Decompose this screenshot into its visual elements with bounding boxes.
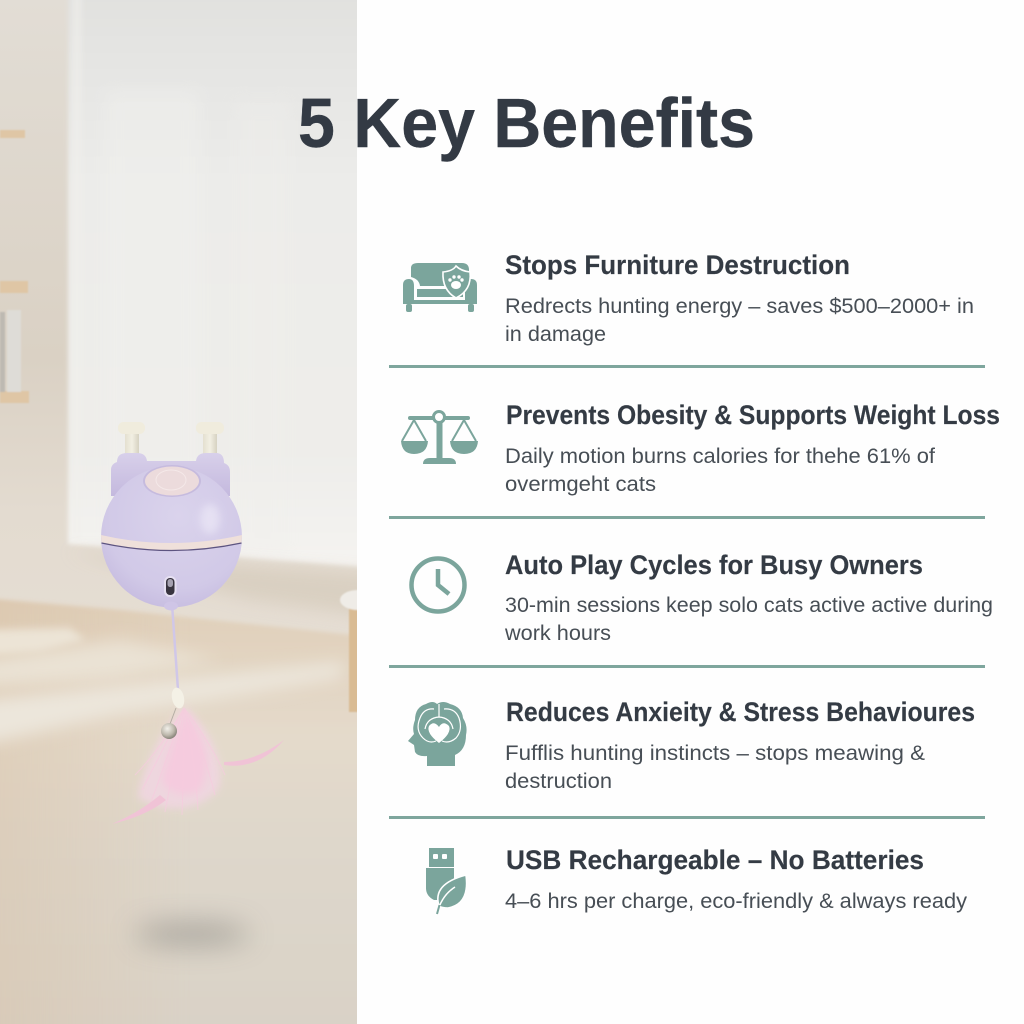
icon: USB plug with leaf (426, 848, 467, 914)
icon: sofa with paw shield (403, 263, 477, 312)
benefit 1: furniture (403, 250, 974, 346)
window curtain (66, 0, 357, 568)
floor (0, 598, 357, 1024)
description (505, 741, 925, 793)
heading: Stops Furniture Destruction (505, 250, 850, 280)
panel: room photo (0, 0, 357, 1024)
benefit 5: USB (426, 845, 967, 914)
power button (143, 465, 201, 497)
icon: balance scale (401, 412, 478, 464)
description: 4–6 hrs per charge, eco-friendly & always ready (505, 889, 967, 913)
title: 5 Key Benefits (298, 84, 755, 162)
description (504, 593, 993, 645)
bell (170, 708, 176, 724)
feather (112, 706, 284, 824)
heading: Prevents Obesity & Supports Weight Loss (506, 400, 1000, 430)
heading: Reduces Anxieity & Stress Behavioures (506, 697, 975, 727)
wall base (217, 564, 357, 614)
feather tails (224, 740, 284, 766)
description: Fufflis hunting instincts – stops meawing & (505, 741, 925, 765)
heading: Auto Play Cycles for Busy Owners (505, 550, 923, 580)
wand stem (172, 604, 178, 690)
heading: USB Rechargeable – No Batteries (506, 845, 924, 875)
mounting screws (118, 422, 224, 456)
icon: clock (412, 558, 464, 612)
benefit 2: weight (401, 400, 1000, 496)
description (505, 444, 935, 496)
bead (170, 686, 186, 710)
description (505, 294, 974, 346)
icon: head with brain and heart (408, 702, 467, 766)
benefit 3: auto play (412, 550, 993, 645)
description: 30-min sessions keep solo cats active active during (505, 593, 993, 617)
benefit 4: anxiety (408, 697, 975, 793)
description: Redrects hunting energy – saves $500–2000+ in (505, 294, 974, 318)
description: in damage (505, 322, 606, 346)
highlight (200, 504, 220, 534)
sensor slot (164, 576, 176, 597)
ball body (101, 466, 242, 608)
equator band (101, 535, 242, 550)
description: Daily motion burns calories for thehe 61% of (505, 444, 935, 468)
product: cat toy (101, 422, 284, 824)
side table (340, 590, 357, 712)
floor shadow (134, 924, 250, 944)
description: overmgeht cats (505, 472, 656, 496)
wall shelves (0, 130, 29, 403)
mounting bracket (111, 453, 230, 496)
description: destruction (505, 769, 612, 793)
description: work hours (504, 621, 611, 645)
